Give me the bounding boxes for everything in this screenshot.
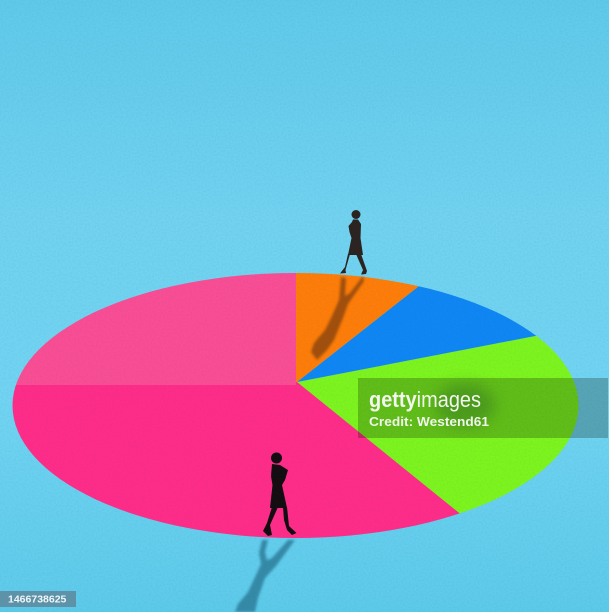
slice: pink upper [16, 273, 296, 385]
slice: green [297, 336, 578, 516]
slice: orange [296, 273, 419, 382]
id tag background [0, 591, 76, 607]
shadow: bottom figure [235, 540, 295, 612]
watermark logo: gettyimages [369, 387, 481, 412]
shadow: top figure [311, 276, 364, 360]
watermark shading [435, 383, 495, 427]
slice: pink lower [12, 382, 460, 538]
figure: woman walking on pink slice [263, 452, 296, 536]
image id tag [0, 591, 76, 607]
pie chart [12, 273, 578, 538]
id tag number: 1466738625 [8, 594, 67, 606]
watermark band [358, 378, 608, 438]
slice: blue [298, 286, 536, 382]
watermark panel [358, 378, 608, 438]
watermark credit: Credit: Westend61 [369, 414, 489, 429]
figure: woman walking on top edge [340, 210, 367, 274]
